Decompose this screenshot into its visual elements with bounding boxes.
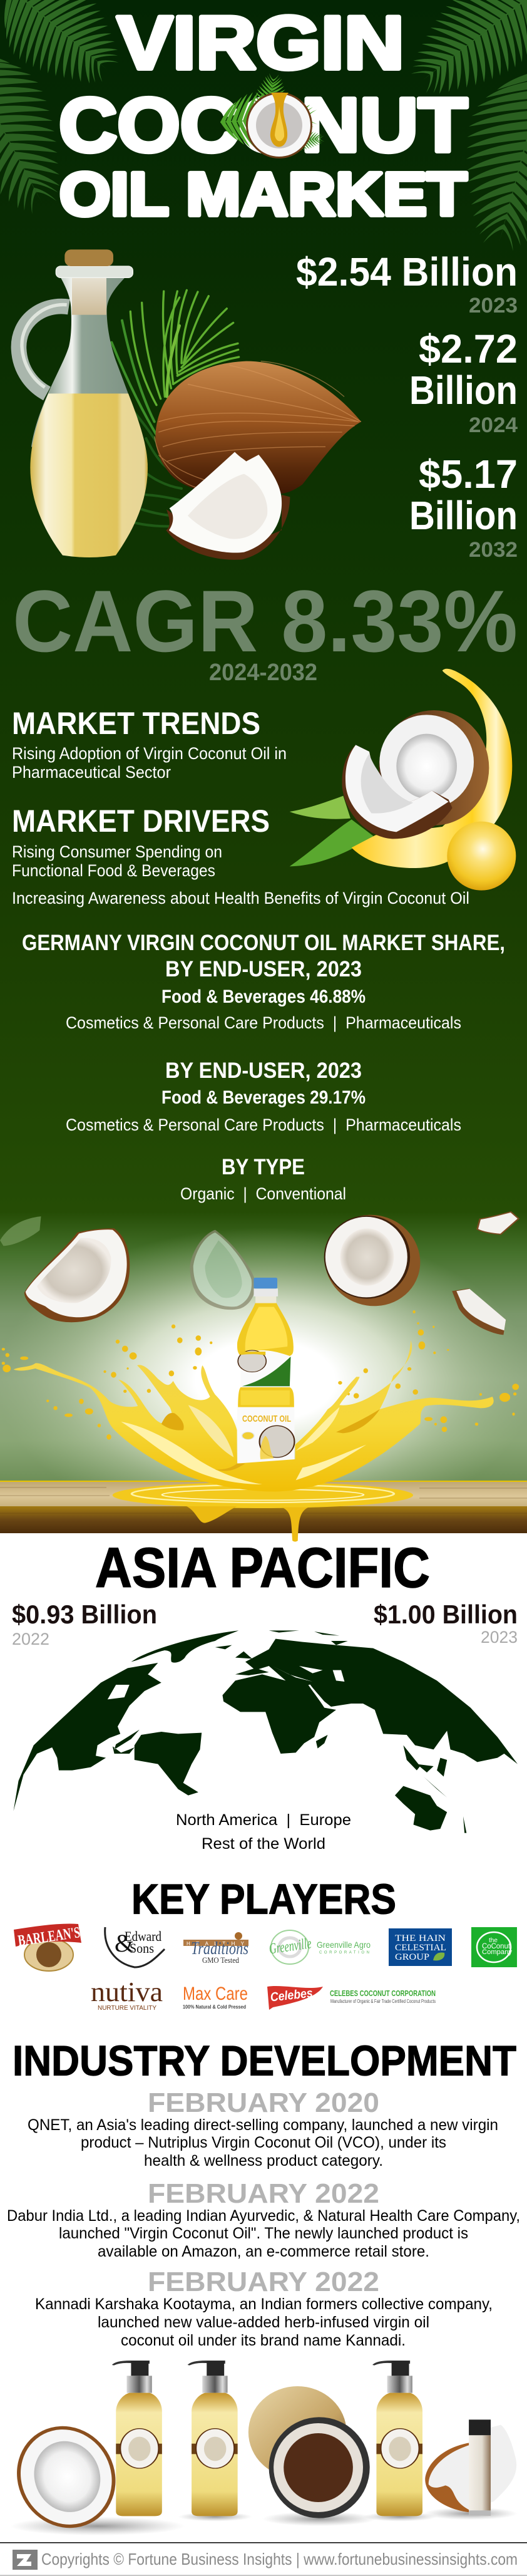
icon: pump bottle 3 xyxy=(372,2361,422,2516)
icon: top-left frond xyxy=(0,0,142,110)
stat: 2032 market size: $5.17 xyxy=(419,452,518,497)
icon: coconut half left xyxy=(11,2424,121,2530)
logo: Celebes: CELEBES COCONUT CORPORATION xyxy=(330,1989,436,1998)
icon: translucent coconut middle xyxy=(190,1230,255,1310)
logo: Barlean's xyxy=(14,1924,81,1971)
illustration: coconut oil products xyxy=(10,2361,518,2535)
title: OIL MARKET xyxy=(59,160,467,228)
segment: by type: BY TYPE xyxy=(222,1155,305,1179)
icon: coconut half right xyxy=(321,1213,424,1308)
development: February 2020: QNET, an Asia's leading direct-selling company, launched a new virgin xyxy=(28,2116,498,2134)
segment: Germany market share by end-user: BY END-USER, 2023 xyxy=(165,957,362,981)
icon: green leaves xyxy=(290,796,374,866)
icon: jar with lid xyxy=(248,2386,370,2518)
stat: 2032 market size: 2032 xyxy=(469,538,518,562)
logo: Barlean's: BARLEAN'S xyxy=(17,1924,81,1950)
logo: The Coconut Company xyxy=(471,1927,517,1967)
icon: palm frond behind coconut xyxy=(111,290,239,526)
market drivers: Rising Consumer Spending on xyxy=(12,842,222,861)
icon: coconut xyxy=(155,361,361,494)
icon: oil pool and splash xyxy=(13,1340,494,1542)
logo: The Coconut Company: CoConut xyxy=(482,1942,511,1950)
regions list: North America | Europe xyxy=(176,1811,351,1829)
stat: 2032 market size xyxy=(409,452,518,562)
title xyxy=(59,1,468,228)
icon: faded leaf xyxy=(0,1216,41,1246)
logo: Hain Celestial: GROUP xyxy=(395,1952,429,1962)
icon: Fortune Business Insights logo xyxy=(13,2550,38,2570)
development: February 2020: health & wellness product category. xyxy=(144,2152,383,2170)
icon: glass jug xyxy=(19,249,148,557)
bottle label text: COCONUT OIL xyxy=(242,1414,291,1424)
logo: Edward & Sons: Sons xyxy=(130,1940,154,1956)
wooden table xyxy=(0,1481,527,1533)
icon: pump bottle 2 xyxy=(188,2361,238,2516)
stat: CAGR: 2024-2032 xyxy=(209,660,317,686)
logo: Healthy Traditions xyxy=(183,1932,248,1965)
regions list xyxy=(176,1811,351,1853)
segment: by type: Organic | Conventional xyxy=(180,1184,346,1203)
logo: Celebes: Celebes xyxy=(270,1987,314,2005)
logo: Healthy Traditions: Traditions xyxy=(191,1939,248,1958)
region heading: Asia Pacific: ASIA PACIFIC xyxy=(95,1537,430,1600)
illustration: oil jug and coconut xyxy=(19,249,361,560)
icon: oil sphere xyxy=(447,822,516,891)
segment: Germany market share by end-user xyxy=(22,931,505,1032)
footer xyxy=(0,2542,527,2576)
logo: Nutiva: nutiva xyxy=(91,1977,163,2007)
icon: left frond xyxy=(0,28,91,232)
icon: coconut piece top right xyxy=(478,1212,519,1234)
logo: Max Care: Max Care xyxy=(183,1984,248,2004)
logo: Hain Celestial: CELESTIAL xyxy=(395,1943,446,1953)
stat: 2023 market size: $2.54 Billion xyxy=(296,249,518,294)
development: February 2020: FEBRUARY 2020 xyxy=(148,2087,379,2118)
icon: right frond xyxy=(441,53,527,262)
logo: The Coconut Company: the xyxy=(489,1937,498,1944)
logo: Greenville Agro: Greenville xyxy=(268,1935,312,1957)
market drivers: Increasing Awareness about Health Benefits of Virgin Coconut Oil xyxy=(12,889,469,908)
stat: Asia Pacific 2023: 2023 xyxy=(481,1628,518,1647)
palm fronds: top corners xyxy=(0,0,527,262)
segment: by end-user: BY END-USER, 2023 xyxy=(165,1058,362,1083)
development: February 2020 xyxy=(28,2087,498,2170)
development: February 2022, Kannadi: launched new value-added herb-infused virgin oil xyxy=(98,2314,429,2331)
white lower section xyxy=(0,1533,527,2576)
icon: coconut half with oil drop in title xyxy=(219,71,325,158)
market trends: Rising Adoption of Virgin Coconut Oil in xyxy=(12,744,287,763)
logo: Healthy Traditions: GMO Tested xyxy=(202,1955,239,1965)
development: February 2022, Kannadi: FEBRUARY 2022 xyxy=(148,2267,379,2297)
icon: coconut half right with roll-on xyxy=(425,2419,516,2516)
market drivers xyxy=(12,804,469,908)
icon: oil bottle xyxy=(237,1278,294,1464)
stat: Asia Pacific 2022 xyxy=(12,1600,157,1648)
icon: oil swoosh xyxy=(352,669,512,868)
segment: by type xyxy=(180,1155,346,1203)
development: February 2022, Kannadi: coconut oil under its brand name Kannadi. xyxy=(121,2332,406,2349)
logo: Edward & Sons xyxy=(105,1927,165,1967)
icon: coconut wedge xyxy=(342,745,453,839)
stat: 2023 market size: 2023 xyxy=(469,294,518,318)
icon: top-right frond xyxy=(390,0,527,120)
logo: Greenville Agro: CORPORATION xyxy=(319,1951,369,1955)
development: February 2022, Dabur xyxy=(7,2178,520,2260)
icon: coconut wedge right xyxy=(452,1288,506,1335)
stat: 2024 market size xyxy=(409,326,518,437)
scene: oil splash panel xyxy=(0,1212,527,1542)
title: COCONUT xyxy=(59,83,468,168)
stat: 2024 market size: $2.72 xyxy=(419,326,518,371)
logo: Max Care: 100% Natural & Cold Pressed xyxy=(183,2004,246,2010)
title: VIRGIN xyxy=(117,1,404,85)
market trends: MARKET TRENDS xyxy=(12,706,260,741)
logos: key players xyxy=(14,1924,517,2012)
page background: green top section xyxy=(0,0,527,1212)
logo: Hain Celestial xyxy=(389,1928,452,1966)
world map xyxy=(13,1630,518,1833)
stat: Asia Pacific 2023 xyxy=(374,1600,518,1647)
stat: 2023 market size xyxy=(296,249,518,318)
development: February 2022, Kannadi xyxy=(35,2267,493,2349)
stat: Asia Pacific 2022: 2022 xyxy=(12,1630,49,1648)
shadows xyxy=(10,2507,518,2535)
market trends: Pharmaceutical Sector xyxy=(12,763,171,782)
development: February 2022, Kannadi: Kannadi Karshaka Kootayma, an Indian formers collective company, xyxy=(35,2295,493,2313)
heading: key players: KEY PLAYERS xyxy=(131,1875,396,1923)
logo: Greenville Agro xyxy=(268,1930,371,1964)
segment: by end-user: Cosmetics & Personal Care Products | Pharmaceuticals xyxy=(66,1115,461,1134)
logo: Edward & Sons: Edward xyxy=(125,1928,161,1944)
logo: The Coconut Company: Company xyxy=(482,1948,513,1956)
market drivers: Functional Food & Beverages xyxy=(12,861,215,880)
icon: coconut half left xyxy=(24,1228,130,1322)
segment: Germany market share by end-user: Cosmetics & Personal Care Products | Pharmaceuticals xyxy=(66,1013,461,1032)
segment: by end-user xyxy=(66,1058,461,1134)
market trends xyxy=(12,706,287,782)
icon: oil droplets xyxy=(2,1310,519,1440)
development: February 2020: product – Nutriplus Virgin Coconut Oil (VCO), under its xyxy=(81,2134,446,2151)
regions list: Rest of the World xyxy=(202,1835,325,1853)
icon: coconut half xyxy=(379,710,489,825)
icon: pump bottle 1 xyxy=(112,2361,162,2516)
logo: Max Care xyxy=(183,1984,248,2010)
stat: Asia Pacific 2023: $1.00 Billion xyxy=(374,1600,518,1629)
logo: Celebes: Manufacturer of Organic & Fair Trade Certified Coconut Products xyxy=(330,1999,436,2004)
stat: 2024 market size: 2024 xyxy=(469,413,518,437)
development: February 2022, Dabur: available on Amazon, an e-commerce retail store. xyxy=(98,2243,429,2260)
stat: Asia Pacific 2022: $0.93 Billion xyxy=(12,1600,157,1629)
development: February 2022, Dabur: launched "Virgin Coconut Oil". The newly launched product is xyxy=(59,2225,468,2242)
segment: by end-user: Food & Beverages 29.17% xyxy=(161,1087,366,1108)
logo: Celebes xyxy=(267,1986,436,2010)
development: February 2022, Dabur: FEBRUARY 2022 xyxy=(148,2178,379,2209)
icon: coconut piece xyxy=(166,452,290,560)
illustration: coconut with oil swoosh xyxy=(290,669,516,891)
logo: Healthy Traditions: HEALTHY xyxy=(187,1941,245,1947)
market drivers: MARKET DRIVERS xyxy=(12,804,270,839)
logo: Edward & Sons: & xyxy=(115,1929,134,1957)
logo: Greenville Agro: Greenville Agro xyxy=(317,1940,371,1950)
segment: Germany market share by end-user: Food & Beverages 46.88% xyxy=(161,986,366,1007)
logo: Hain Celestial: THE HAIN xyxy=(395,1933,446,1943)
logo: Nutiva: NURTURE VITALITY xyxy=(98,2005,156,2012)
